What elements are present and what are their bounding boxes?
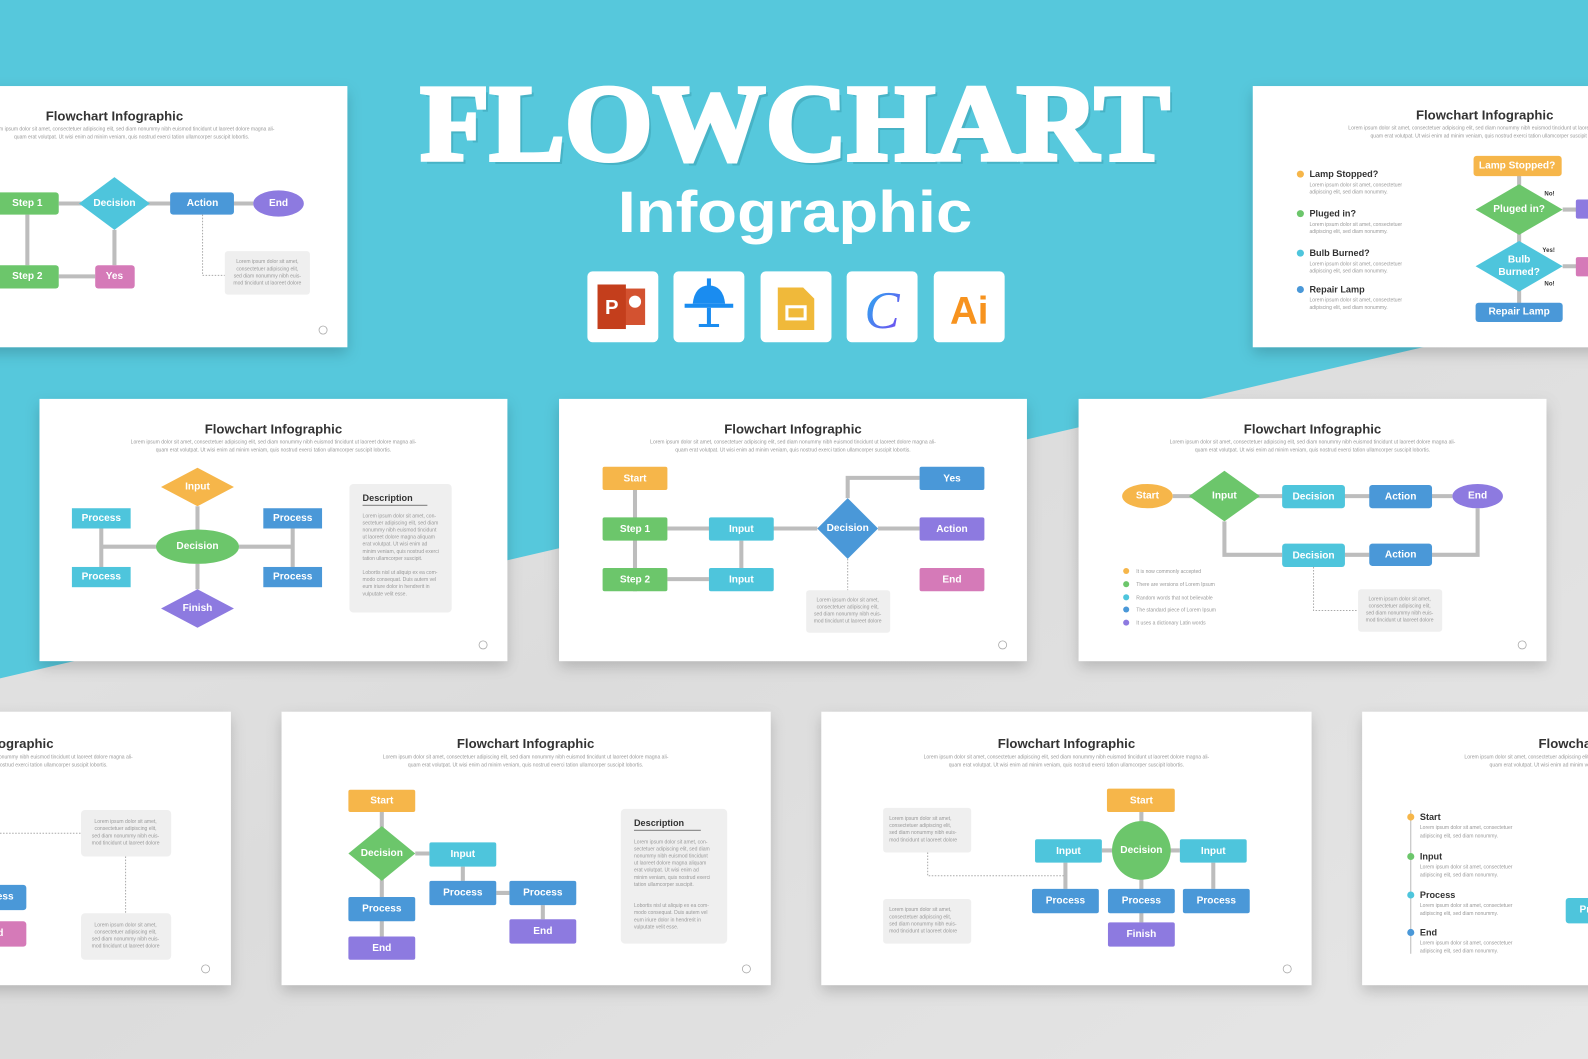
panel: slide row3 middle-left: minim veniam, quis nostrud exerci [634,875,710,881]
icon: Canva: C [865,282,901,340]
note box [225,251,310,295]
description box: ut laoreet dolore magna aliquam [363,535,435,541]
panel: slide row2 right: mod tincidunt ut laoreet dolore [1366,618,1434,624]
panel: slide top-left: Flowchart Infographic [46,108,183,123]
note box: sed diam nonummy nibh euis- [234,273,301,279]
note box: mod tincidunt ut laoreet dolore [814,619,882,625]
panel: slide row3 middle-left: Flowchart Infographic [457,736,594,751]
bullet list: Lorem ipsum dolor sit amet, consectetuer [1309,182,1402,188]
panel: slide row3 left (cropped): sed diam nonummy nibh euis- [92,937,160,943]
note box: consectetuer adipiscing elit, [236,266,298,272]
panel: slide row3 left (cropped): mod tincidunt ut laoreet dolore [92,944,160,950]
panel: slide row2 right: End [1468,491,1487,502]
panel: slide row2 right: Decision [1292,550,1335,561]
panel: slide row3 middle-left: quam erat volutpat. Ut wisi enim ad minim veniam, quis nostrud exerci tation ullamcorper suscipit lobortis. [408,762,643,768]
description box: vulputate velit esse. [363,591,407,597]
icon: Google Slides [761,271,831,342]
panel: slide row3 middle-right: Input [1056,846,1081,857]
decision ellipse: Decision [176,541,219,552]
panel: slide top-left: quam erat volutpat. Ut wisi enim ad minim veniam, quis nostrud exerci tation ullamcorper suscipit lobortis. [14,135,249,141]
step 1: Step 1 [12,198,43,209]
panel: slide row3 middle-left: eum iriure dolor in hendrerit in [634,917,701,923]
panel: slide row3 middle-left: sectetuer adipiscing elit, sed diam [634,846,710,852]
panel: slide row3 right (cropped): Start [1420,812,1441,822]
description box: minim veniam, quis nostrud exerci [363,549,439,555]
panel: slide row3 middle-left: Lorem ipsum dolor sit amet, consectetuer adipiscing elit, sed diam nonummy nibh euismod tincidunt ut laoreet dolore magna ali- [383,754,669,760]
panel: slide row3 left (cropped): Lorem ipsum dolor sit amet, [94,819,157,825]
panel: slide row2 left: Flowchart Infographic [205,421,342,436]
panel: slide row3 middle-right: Start [1130,795,1154,806]
note box: sed diam nonummy nibh euis- [814,612,882,618]
icon: Canva [847,271,918,342]
bullet list: Lorem ipsum dolor sit amet, consectetuer [1309,298,1402,304]
step 1 [0,192,59,215]
panel: slide row2 middle: Lorem ipsum dolor sit amet, consectetuer adipiscing elit, sed diam nonummy nibh euismod tincidunt ut laoreet dolore magna ali- [650,439,936,445]
repair lamp: Repair Lamp [1489,306,1550,317]
nodes: End [942,575,962,586]
title main: FLOWCHART [420,63,1170,184]
panel: slide row3 right (cropped): Lorem ipsum dolor sit amet, consectetuer [1420,865,1513,871]
panel: slide row2 left [39,399,507,661]
icon: PowerPoint: P [605,297,618,319]
panel: slide row3 right (cropped) [1362,712,1588,985]
panel: slide row3 right (cropped): Lorem ipsum dolor sit amet, consectetuer [1420,903,1513,909]
panel: slide top-right: quam erat volutpat. Ut wisi enim ad minim veniam, quis nostrud exerci tation ullamcorper suscipit [1370,134,1587,140]
decision ellipse [156,530,239,564]
panel: slide row3 right (cropped): Process [1420,890,1455,900]
bullet list: adipiscing elit, sed diam nonummy. [1309,305,1388,311]
bullet list [1297,169,1402,311]
app icons row [587,271,1005,342]
panel: slide row3 left (cropped): sed diam nonummy nibh euis- [92,833,160,839]
bullet list: adipiscing elit, sed diam nonummy. [1309,189,1388,195]
note box: consectetuer adipiscing elit, [817,604,879,610]
repair lamp [1476,303,1563,322]
description box: tation ullamcorper suscipit. [363,556,422,562]
panel: slide row3 middle-right: Input [1201,846,1226,857]
process boxes: Process [82,572,121,583]
description box: modo consequat. Duis autem vel [363,577,436,583]
finish diamond [161,589,234,628]
step 2: Step 2 [12,271,43,282]
bullet list: adipiscing elit, sed diam nonummy. [1309,268,1388,274]
description box: Lorem ipsum dolor sit amet, con- [363,513,436,519]
bullet list: Repair Lamp [1309,285,1365,295]
panel: slide row3 middle-right: Lorem ipsum dolor sit amet, [889,907,951,913]
panel: slide row3 middle-left: Start [370,795,394,806]
panel: slide row3 middle-left: Description [634,818,684,828]
panel: slide row3 middle-left: erat volutpat. Ut wisi enim ad [634,868,699,874]
action: Action [187,198,218,209]
panel: slide row3 middle-left: ut laoreet dolore magna aliquam [634,861,706,867]
nodes: Action [936,524,968,535]
panel: slide row2 middle: quam erat volutpat. Ut wisi enim ad minim veniam, quis nostrud exerci tation ullamcorper suscipit lobortis. [675,448,911,454]
bullet list: Bulb Burned? [1309,248,1370,258]
diamond bulb burned: Burned? [1498,267,1540,278]
decision diamond [79,177,150,230]
yes [95,265,135,289]
panel: slide row2 right: Decision [1292,492,1335,503]
panel: slide row3 right (cropped): Input [1420,852,1442,862]
diamond bulb burned: Bulb [1508,255,1530,266]
note box [806,590,890,633]
panel: slide top-left [0,86,347,347]
lamp stopped: Lamp Stopped? [1479,161,1555,172]
panel: slide row3 middle-left: tation ullamcorper suscipit. [634,882,694,888]
note box: mod tincidunt ut laoreet dolore [233,280,302,286]
panel: slide row3 middle-right: consectetuer adipiscing elit, [889,823,951,829]
panel: slide row2 right: sed diam nonummy nibh euis- [1366,611,1434,617]
description box: eum iriure dolor in hendrerit in [363,584,430,590]
panel: slide top-right: No! [1544,282,1555,288]
diamond bulb burned [1476,241,1563,292]
nodes: Input [729,524,754,535]
panel: slide row3 middle-left: Input [450,849,476,860]
panel: slide row2 right: quam erat volutpat. Ut wisi enim ad minim veniam, quis nostrud exerci tation ullamcorper suscipit lobortis. [1195,448,1430,454]
panel: slide row3 middle-left: Lobortis nisl ut aliquip ex ea com- [634,903,709,909]
panel: slide row3 middle-right: consectetuer adipiscing elit, [889,914,951,920]
panel: slide row2 left: quam erat volutpat. Ut wisi enim ad minim veniam, quis nostrud exerci tation ullamcorper suscipit lobortis. [156,448,391,454]
title shadow: FLOWCHART: FLOWCHART [424,67,1174,188]
legend [1123,568,1216,627]
panel: slide row3 middle-right: Process [1122,896,1161,907]
description box: Lobortis nisl ut aliquip ex ea com- [363,570,438,576]
panel: slide row3 left (cropped): Lorem ipsum dolor sit amet, [94,922,157,928]
panel: slide row2 right: Input [1212,491,1237,502]
nodes: Yes [943,473,961,484]
legend: There are versions of Lorem Ipsum [1136,582,1215,588]
panel: slide row2 right: Start [1136,491,1160,502]
panel: slide row3 middle-right [821,712,1312,985]
diamond pluged in [1476,184,1563,235]
icon: Illustrator: Ai [950,290,988,333]
panel: slide row3 middle-left: End [372,943,391,954]
yes: Yes [106,271,124,282]
input diamond: Input [185,481,210,492]
legend: Random words that not believable [1136,595,1213,601]
step 2 [0,265,59,289]
finish diamond: Finish [183,603,212,614]
panel: slide row3 right (cropped): adipiscing elit, sed diam nonummy. [1420,833,1498,839]
panel: slide row2 right: consectetuer adipiscing elit, [1369,603,1431,609]
subtitle: Infographic: Infographic [618,180,972,245]
action [170,192,234,215]
description box: sectetuer adipiscing elit, sed diam [363,520,438,526]
panel: slide row3 middle-right: quam erat volutpat. Ut wisi enim ad minim veniam, quis nostrud exerci tation ullamcorper suscipit lobortis. [949,762,1184,768]
panel: slide row3 right (cropped): Lorem ipsum dolor sit amet, consectetuer [1420,941,1513,947]
panel: slide top-right: Flowchart Infographic [1416,107,1553,122]
icon: Illustrator [934,271,1005,342]
nodes: Start [623,473,647,484]
panel: slide top-right: Yes! [1542,248,1555,254]
end: End [269,198,288,209]
diamond pluged in: Pluged in? [1493,204,1545,215]
panel: slide row2 right: Lorem ipsum dolor sit amet, [1368,596,1431,602]
nodes: Step 2 [620,575,651,586]
panel: slide row3 right (cropped): adipiscing elit, sed diam nonummy. [1420,873,1498,879]
bullet list: Lorem ipsum dolor sit amet, consectetuer [1309,261,1402,267]
process boxes: Process [273,572,313,583]
end [253,190,304,217]
note box: Lorem ipsum dolor sit amet, [236,259,299,265]
panel: slide row2 right: Action [1385,492,1416,503]
decision diamond: Decision [93,198,136,209]
panel: slide row3 middle-right: Lorem ipsum dolor sit amet, consectetuer adipiscing elit, sed diam nonummy nibh euismod tincidunt ut laoreet dolore magna ali- [924,754,1210,760]
legend: The standard piece of Lorem Ipsum [1136,608,1216,614]
nodes: Step 1 [620,524,651,535]
panel: slide row3 middle-right: Finish [1126,929,1156,940]
panel: slide row3 middle-left: Process [362,904,402,915]
panel: slide row3 right (cropped): Lorem ipsum dolor sit amet, consectetuer [1420,825,1513,831]
panel: slide row2 right [1079,399,1546,661]
panel: slide row3 middle-right: Process [1046,896,1085,907]
bullet list: Lamp Stopped? [1309,169,1379,179]
panel: slide row3 middle-left: nonummy nibh euismod tincidunt [634,854,708,860]
panel: slide row3 left (cropped): mod tincidunt ut laoreet dolore [92,840,160,846]
panel: slide row3 middle-right: Lorem ipsum dolor sit amet, [889,816,951,822]
bullet list: adipiscing elit, sed diam nonummy. [1309,229,1388,235]
panel: slide row3 middle-left: Process [523,887,563,898]
panel: slide row3 right (cropped): adipiscing elit, sed diam nonummy. [1420,911,1498,917]
panel: slide row3 middle-right: Flowchart Infographic [998,736,1135,751]
panel: slide row3 left (cropped) [0,712,231,985]
panel: slide row3 middle-left: vulputate velit esse. [634,924,678,930]
background cyan diagonal band [0,0,1588,678]
panel: slide row3 left (cropped): consectetuer adipiscing elit, [95,929,157,935]
panel: slide row3 middle-right: Process [1197,896,1236,907]
description box: nonummy nibh euismod tincidunt [363,528,437,534]
nodes: Decision [827,523,869,534]
panel: slide row2 right: Lorem ipsum dolor sit amet, consectetuer adipiscing elit, sed diam nonummy nibh euismod tincidunt ut laoreet dolore magna ali- [1170,439,1456,445]
panel: slide row3 middle-right: sed diam nonummy nibh euis- [889,830,957,836]
input diamond [161,468,234,506]
panel: slide row2 middle: Flowchart Infographic [724,421,862,436]
nodes [603,467,984,591]
panel: slide row2 left: Lorem ipsum dolor sit amet, consectetuer adipiscing elit, sed diam nonummy nibh euismod tincidunt ut laoreet dolore magna ali- [131,439,417,445]
panel: slide row2 right: Flowchart Infographic [1244,421,1381,436]
lamp stopped [1474,156,1562,176]
panel: slide row3 middle-left: Lorem ipsum dolor sit amet, con- [634,839,708,845]
panel: slide row3 middle-left: Process [443,887,483,898]
icon: Keynote [673,271,744,342]
note box: Lorem ipsum dolor sit amet, [817,597,879,603]
panel: slide top-right [1253,86,1588,347]
panel: slide row3 middle-left: End [533,926,552,937]
panel: slide row3 left (cropped): consectetuer adipiscing elit, [95,826,157,832]
bullet list: Pluged in? [1309,209,1356,219]
description box: Description [363,493,413,503]
bullet list: Lorem ipsum dolor sit amet, consectetuer [1309,222,1402,228]
panel: slide row3 middle-left: modo consequat. Duis autem vel [634,910,708,916]
panel: slide row3 middle-left [282,712,771,985]
legend: It uses a dictionary Latin words [1136,621,1206,627]
panel: slide row2 middle [559,399,1027,661]
process boxes: Process [82,513,121,524]
panel: slide row3 middle-right: Decision [1120,845,1162,856]
panel: slide top-right: No! [1544,191,1555,197]
panel: slide row3 right (cropped): End [1420,927,1437,937]
process boxes: Process [273,513,313,524]
panel: slide row3 middle-right: mod tincidunt ut laoreet dolore [889,928,957,934]
nodes: Input [729,575,754,586]
panel: slide row3 middle-right: mod tincidunt ut laoreet dolore [889,837,957,843]
description box: erat volutpat. Ut wisi enim ad [363,542,428,548]
panel: slide row2 right: Action [1385,549,1416,560]
panel: slide row3 middle-right: sed diam nonummy nibh euis- [889,921,957,927]
description box [349,484,452,613]
panel: slide row3 middle-left: Decision [361,848,403,859]
icon: PowerPoint [587,271,658,342]
panel: slide row3 right (cropped): adipiscing elit, sed diam nonummy. [1420,949,1498,955]
legend: It is now commonly accepted [1136,569,1201,575]
process boxes [72,508,322,587]
